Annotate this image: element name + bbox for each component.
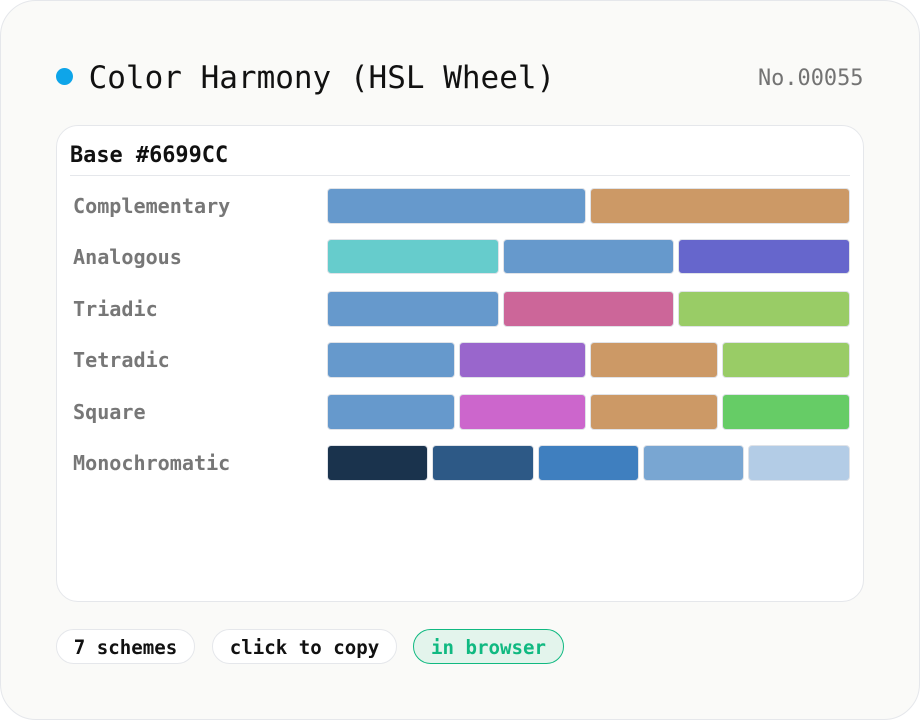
swatches: Monochromatic [327,445,850,481]
swatches: Triadic [327,291,850,327]
chip: in browser: in browser [431,636,546,659]
chip: click to copy: click to copy [230,636,379,659]
icon: status dot [56,68,73,85]
label: Triadic: Triadic [73,297,158,321]
panel: harmony schemes [56,125,864,602]
label: Tetradic: Tetradic [73,348,170,372]
swatches: Square [327,394,850,430]
title: Color Harmony (HSL Wheel) [89,60,555,96]
chip: in browser [413,629,564,664]
label: Square: Square [73,400,146,424]
chip: 7 schemes: 7 schemes [74,636,177,659]
chip: click to copy [212,629,397,664]
chip: 7 schemes [56,629,195,664]
swatches: Analogous [327,239,850,274]
serial number: No.00055 [758,66,863,91]
swatches: Complementary [327,188,850,224]
label: Monochromatic: Monochromatic [73,451,230,475]
label: Analogous: Analogous [73,245,182,269]
label: Complementary: Complementary [73,194,230,218]
heading: base colour: Base #6699CC [70,143,228,168]
swatches: Tetradic [327,342,850,378]
